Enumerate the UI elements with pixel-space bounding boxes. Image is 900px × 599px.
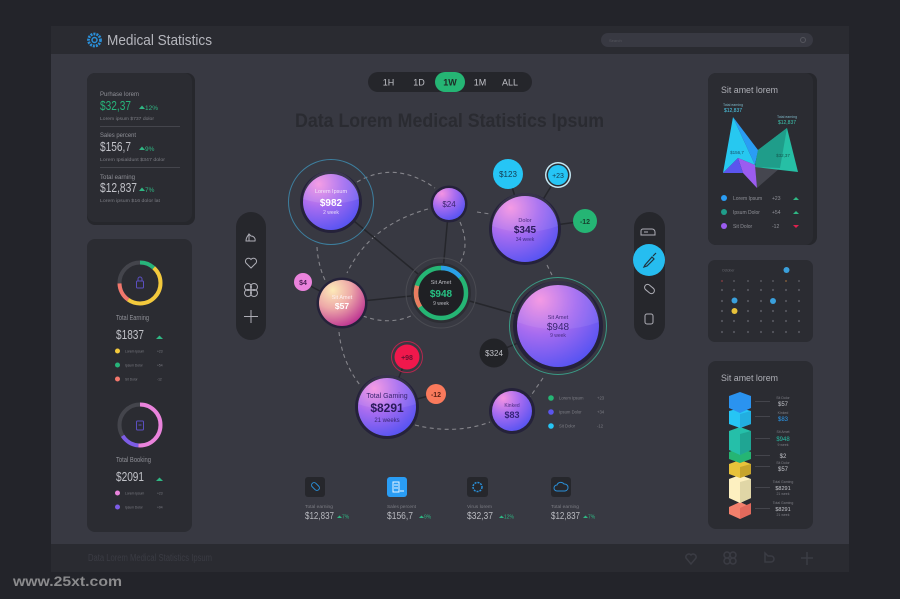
stat: purchase: 12%: [145, 105, 158, 112]
stat: total earning: 7%: [145, 187, 155, 194]
header bar: [51, 26, 849, 54]
bubble: 57: [316, 278, 368, 328]
time range selector: [368, 72, 532, 92]
panel: key figures: [87, 73, 195, 225]
time range selector: 1W: [443, 78, 457, 88]
bubble: 24: [430, 186, 468, 222]
network legend: +23: [597, 396, 605, 400]
earning legend: [115, 348, 163, 382]
dashed connections: [317, 172, 552, 429]
earning legend: Ipsum Dolor: [125, 364, 144, 368]
panel: calendar: [708, 260, 813, 342]
badge: 4: $4: [299, 280, 307, 287]
stat: virus lorem: [467, 477, 515, 522]
panel title: Sit amet lorem: [721, 85, 778, 96]
stat: total earning two: Total earning: [551, 504, 580, 509]
badge: plus 23: [545, 162, 571, 188]
stat: sales percent: 9%: [424, 514, 432, 520]
search box: [601, 33, 813, 47]
booking legend: Lorem Ipsum: [125, 492, 144, 496]
column value labels: 21 week: [776, 513, 790, 517]
icon: clipboard: [136, 421, 144, 430]
stat: total earning: Lorem ipsum $16 dolor lat: [100, 198, 161, 204]
bubble: sit amet large: $948: [547, 322, 570, 333]
bubble: sit amet center gauge: Sit Amet: [431, 280, 452, 286]
network legend: -12: [597, 424, 604, 428]
badge: minus 12 orange: [426, 384, 446, 404]
bubble: lorem ipsum: $982: [320, 198, 343, 209]
footer caption: Data Lorem Medical Statistics Ipsum: [88, 553, 212, 564]
bubble: lorem ipsum: Lorem Ipsum: [315, 189, 347, 195]
bubble: sit amet center gauge: [406, 258, 476, 328]
stat: total earning two: $12,837: [551, 510, 580, 522]
stacked hexagon column: [729, 392, 751, 519]
stat: sales percent: $156,7: [387, 510, 413, 522]
network chart: [288, 159, 606, 439]
bubble: dolor: Dolor: [518, 218, 532, 224]
network legend: Sit Dolor: [559, 424, 576, 428]
badge: 324: $324: [485, 349, 503, 358]
bubble: lorem ipsum: [288, 160, 374, 244]
time range selector: 1H: [383, 78, 394, 88]
icon: cross bands: [244, 284, 258, 296]
stat: sales: $156,7: [100, 140, 131, 154]
network legend: [548, 395, 605, 429]
bubble: 83: [489, 388, 535, 434]
chart legend: [721, 195, 799, 230]
icon: pill: [643, 283, 656, 295]
search box: Search: [609, 38, 622, 43]
earning label: Total Earning: [116, 315, 149, 322]
bubble: 83: Kinked: [504, 403, 520, 409]
earning legend: Lorem Ipsum: [125, 350, 144, 354]
stat: total earning one: Total earning: [305, 504, 334, 509]
donut: total booking: [120, 404, 160, 446]
booking legend: +23: [157, 492, 163, 496]
network legend: +34: [597, 410, 605, 414]
earning legend: +23: [157, 350, 163, 354]
icon: ambulance: [641, 229, 655, 235]
stat: sales: Sales percent: [100, 132, 136, 139]
stat: total earning one: $12,837: [305, 510, 334, 522]
chart legend: Sit Dolor: [733, 224, 753, 230]
column value labels: $57: [778, 467, 789, 473]
badge: plus 98: [392, 342, 422, 372]
stat: purchase: $32,37: [100, 99, 131, 113]
earning legend: Sit Dolor: [125, 378, 139, 382]
bubble: 57: Sit Amet: [332, 295, 353, 301]
stat: sales: Lorem Ipsialdunt $347 dolor: [100, 157, 165, 163]
donut: total earning: [120, 262, 160, 304]
column value labels: [773, 396, 793, 517]
bubble: total gaming: $8291: [370, 401, 404, 415]
bubble: sit amet center gauge: 9 week: [433, 301, 449, 307]
chart legend: Ipsum Dolor: [733, 210, 760, 216]
stat: total earning two: [551, 477, 596, 522]
chart legend: -12: [772, 224, 779, 230]
column value labels: $57: [778, 402, 789, 408]
3d area chart: $32,37: [776, 153, 790, 158]
column value labels: 21 week: [776, 492, 790, 496]
panel: earning and booking: [87, 239, 192, 532]
chart legend: Lorem Ipsum: [733, 196, 762, 202]
stat: virus lorem: $32,37: [467, 510, 493, 522]
booking label: Total Booking: [116, 457, 151, 464]
column value labels: 9 week: [777, 443, 789, 447]
badge: 123: [493, 159, 523, 189]
badge: minus 12 green: [573, 209, 597, 233]
watermark: www.25xt.com: [12, 573, 122, 589]
stat: sales: 9%: [145, 146, 155, 153]
panel: polygon chart: [708, 73, 817, 245]
3d area chart: $12,837: [778, 120, 796, 126]
stat: sales percent: Sales percent: [387, 504, 417, 509]
right navigation rail: [633, 212, 665, 340]
main dashboard surface: [51, 54, 849, 544]
bubble: 24: $24: [442, 200, 456, 209]
bubble: total gaming: 21 weeks: [374, 418, 400, 424]
stat: total earning one: [305, 477, 350, 522]
3d area chart: [723, 103, 798, 188]
badge: 4: [294, 273, 312, 291]
bubble: lorem ipsum: 2 week: [323, 210, 339, 216]
earning value: $1837: [116, 327, 144, 342]
icon: logo gear: [88, 34, 100, 46]
badge: 324: [480, 338, 508, 368]
column value labels: Sit Amet: [776, 430, 790, 434]
column value labels: $948: [776, 437, 790, 443]
calendar highlights: [732, 267, 790, 314]
panel title: Sit amet lorem: [721, 373, 778, 384]
calendar header: October: [722, 268, 735, 272]
stat: total earning one: 7%: [342, 514, 350, 520]
3d area chart: Total earning: [777, 115, 797, 119]
panel: stacked column: [708, 361, 813, 529]
bubble: dolor: [489, 193, 561, 265]
stat: total earning: [100, 174, 161, 204]
bubble: 83: $83: [504, 410, 520, 420]
column value labels: $2: [780, 454, 787, 460]
stat: virus lorem: Virus lorem: [467, 504, 492, 509]
stat: purchase: Purhase lorem: [100, 91, 139, 98]
solid connections: [303, 174, 585, 407]
column value labels: Kinked: [778, 411, 788, 415]
network legend: Lorem Ipsum: [559, 396, 584, 400]
network legend: Ipsum Dolor: [559, 410, 582, 414]
column value labels: Sit Dolor: [776, 396, 791, 400]
app title: Medical Statistics: [107, 33, 212, 49]
booking legend: Ipsum Dolor: [125, 506, 144, 510]
stat: sales percent: [387, 477, 432, 522]
bubble: sit amet large: Sit Amet: [548, 315, 569, 321]
3d area chart: $156,7: [730, 150, 744, 155]
earning legend: +54: [157, 364, 163, 368]
bubble: total gaming: [355, 375, 419, 439]
bubble: sit amet large: 9 week: [550, 333, 566, 339]
stat: total earning: $12,837: [100, 181, 137, 195]
column value labels: Total Gaming: [773, 480, 793, 484]
stat: purchase: Lorem ipsum $737 dolor: [100, 116, 154, 122]
calendar grid: [721, 280, 800, 333]
time range selector: 1D: [413, 78, 425, 88]
booking legend: [115, 490, 163, 510]
stat: virus lorem: 12%: [504, 514, 515, 520]
badge: 123: $123: [499, 170, 517, 179]
stat: total earning two: 7%: [588, 514, 596, 520]
bubble: dolor: 34 week: [516, 237, 535, 243]
chart legend: +23: [772, 196, 781, 202]
footer icons: [686, 552, 813, 565]
bottom stats row: [305, 477, 596, 522]
time range selector: ALL: [502, 78, 518, 88]
column value labels: $83: [778, 417, 789, 423]
badge: plus 98: +98: [401, 355, 413, 362]
bubble: 57: $57: [335, 301, 349, 311]
badge: minus 12 green: -12: [580, 219, 590, 226]
stat: sales: [100, 132, 165, 163]
3d area chart: $12,837: [724, 108, 742, 114]
column value labels: $8291: [775, 486, 791, 492]
column value labels: Sit Dolor: [776, 461, 791, 465]
booking value: $2091: [116, 469, 144, 484]
stat: purchase: [100, 91, 158, 122]
icon: plus star: [244, 310, 258, 323]
footer bar: [51, 544, 849, 572]
left navigation rail: [236, 212, 266, 340]
icon: bottle: [645, 314, 653, 324]
bubble: sit amet center gauge: $948: [430, 289, 453, 300]
main heading: Data Lorem Medical Statistics Ipsum: [295, 111, 604, 132]
booking legend: +94: [157, 506, 163, 510]
bubble: dolor: $345: [514, 225, 537, 236]
icon: heart: [245, 258, 257, 268]
badge: minus 12 orange: -12: [431, 392, 441, 399]
badge: plus 23: +23: [552, 173, 564, 180]
3d area chart: Total earning: [723, 103, 743, 107]
stat: total earning: Total earning: [100, 174, 135, 181]
icon: lock: [136, 277, 144, 288]
earning legend: -12: [157, 378, 162, 382]
bubble: sit amet large: [510, 278, 606, 374]
icon: bell: [246, 234, 255, 241]
leader lines: [755, 401, 770, 509]
column value labels: $8291: [775, 507, 791, 513]
column value labels: Total Gaming: [773, 501, 793, 505]
time range selector: 1M: [474, 78, 486, 88]
chart legend: +54: [772, 210, 781, 216]
bubble: total gaming: Total Gaming: [366, 393, 408, 400]
active button: syringe: [633, 244, 665, 276]
